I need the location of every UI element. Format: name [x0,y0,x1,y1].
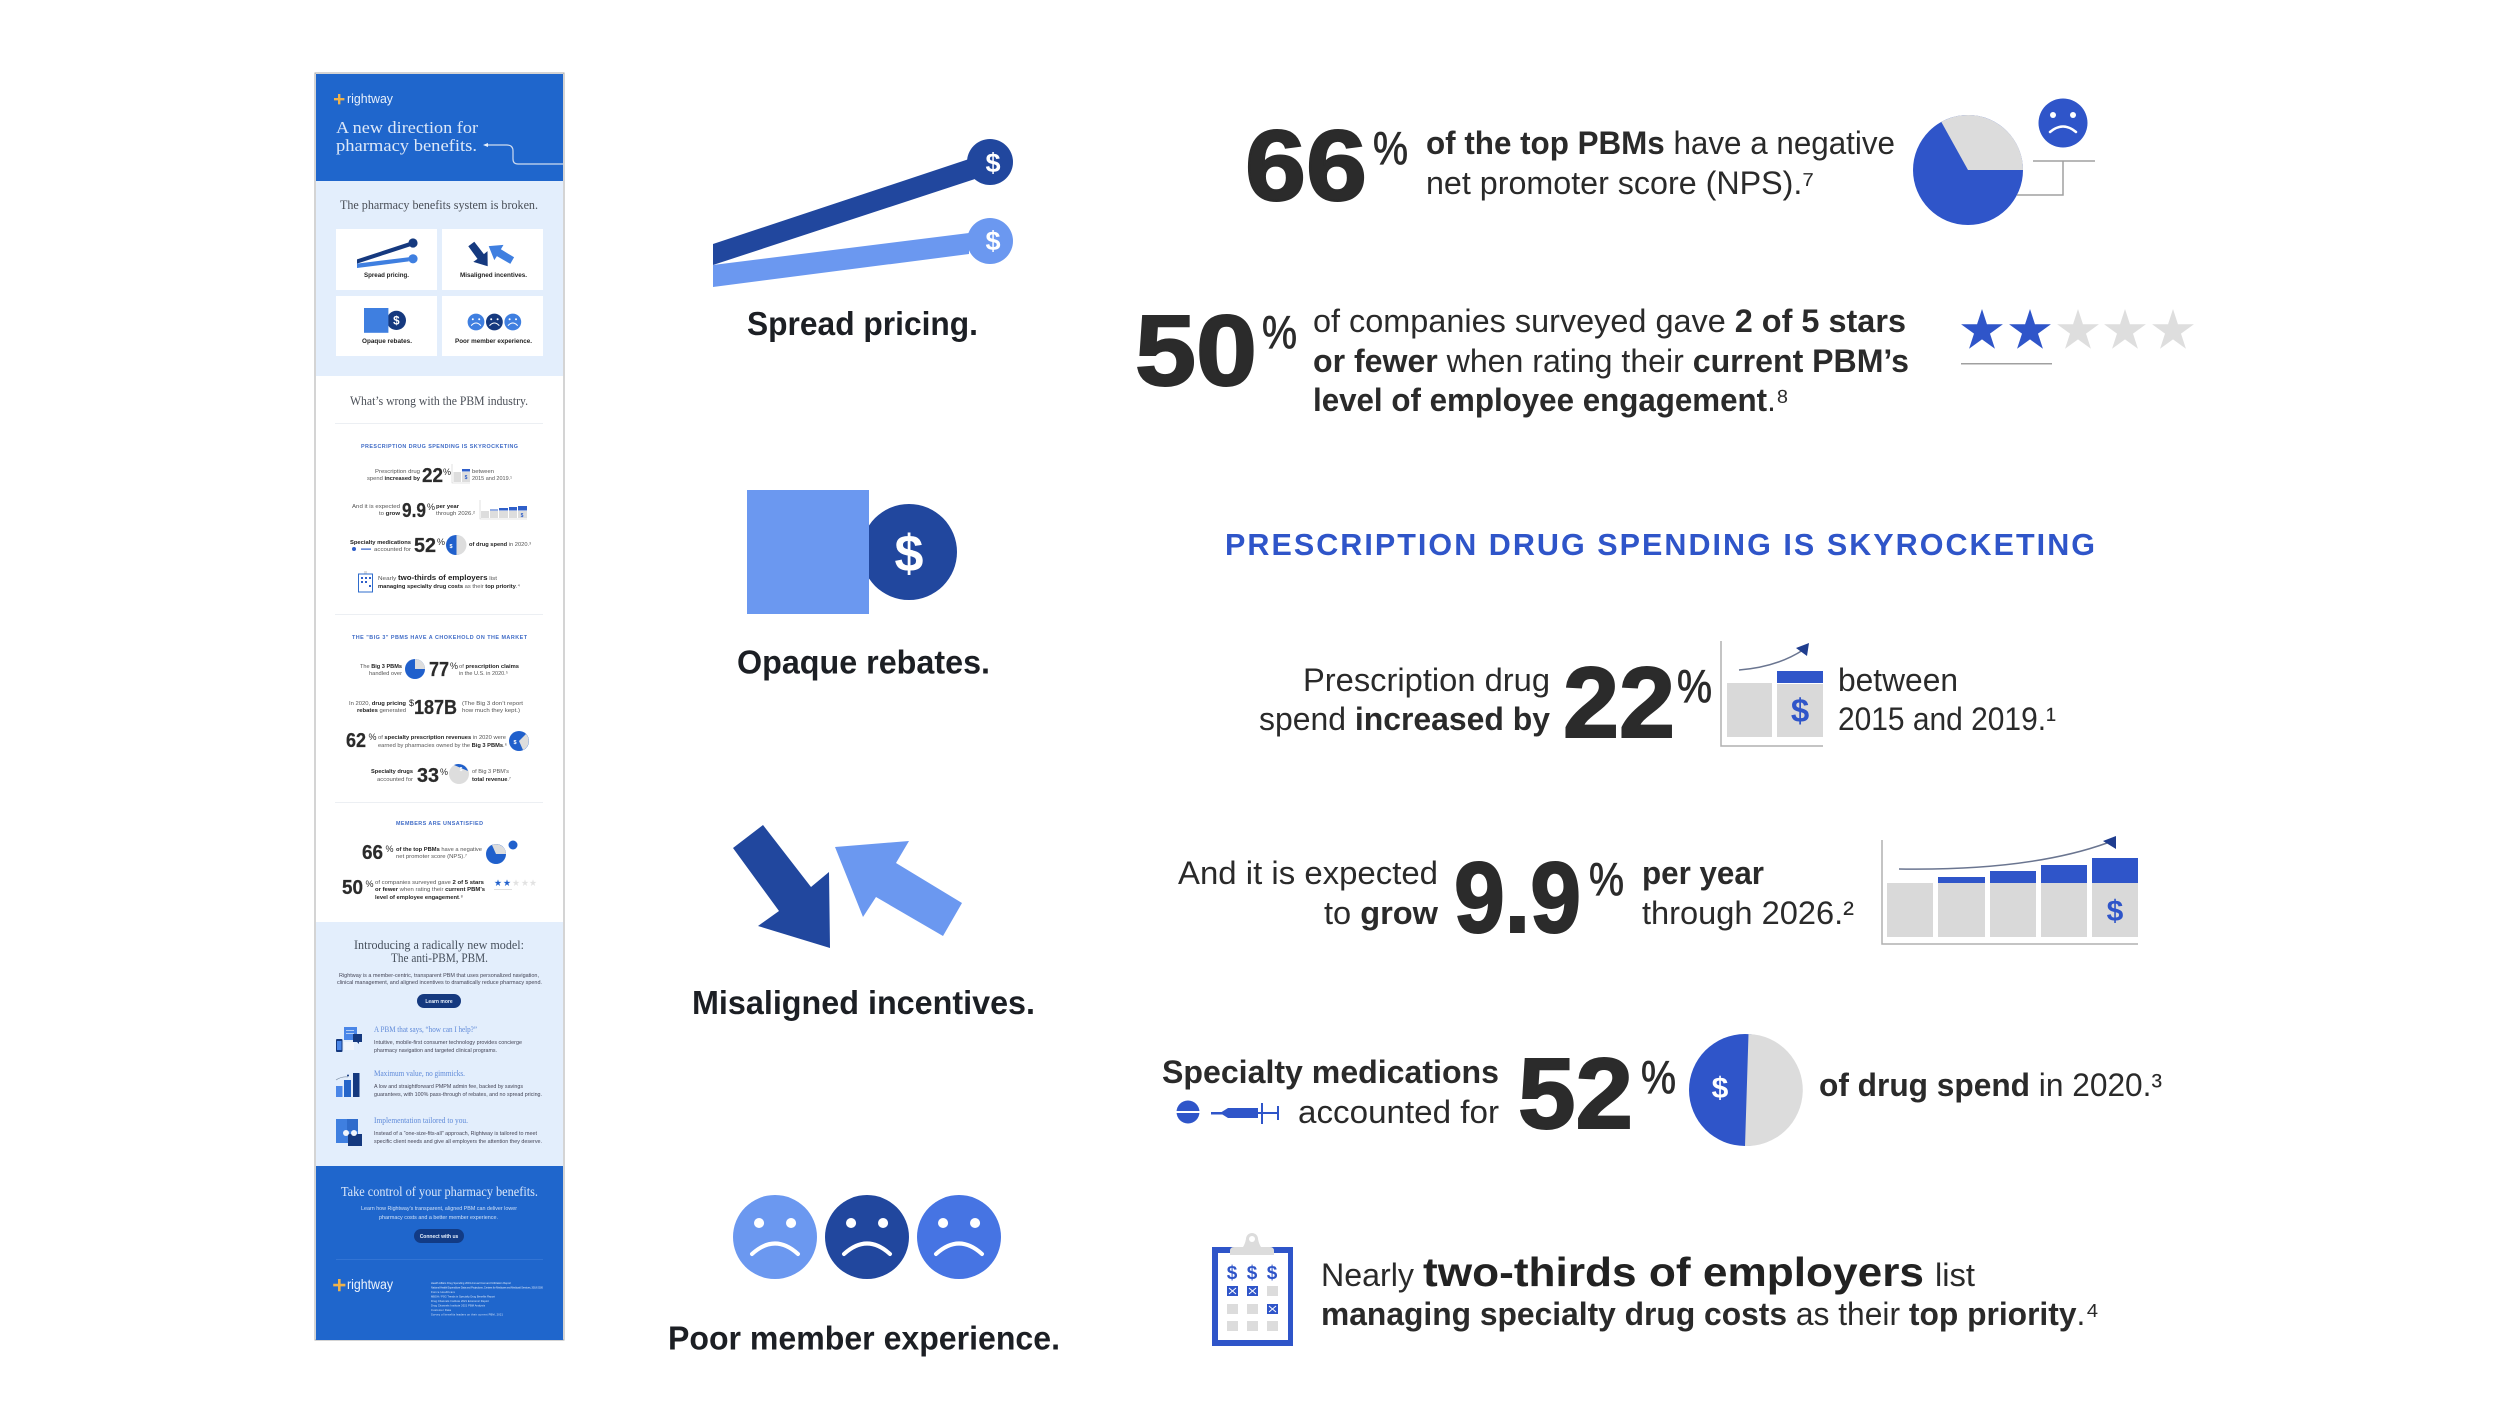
chart: 52 percent pie [1689,1034,1803,1146]
stat mini: 22 percent: $ [465,475,468,481]
text: footnotes: Health Affairs Drug Spending 2019 Annual Cost and Utilization Report [431,1281,511,1285]
stat mini: 22 percent: % [443,467,451,477]
stat: 52 percent: accounted for [1298,1094,1499,1130]
icon: clipboard: $ [1227,1263,1238,1284]
stat mini: 22 percent: 2015 and 2019.¹ [472,476,512,482]
stat: 52 percent: % [1641,1051,1676,1103]
heading mini: unsatisfied: MEMBERS ARE UNSATISFIED [396,821,483,827]
text: footnotes [431,1281,544,1316]
card: opaque rebates mini: $ [393,315,400,328]
stat mini: 50 percent [342,877,536,901]
card: poor member experience mini: Poor member experience. [455,338,532,345]
stat mini: two-thirds of employers [358,571,521,592]
chart: five growing bars [1882,836,2138,944]
stat: 9.9 percent [1178,836,2138,954]
item: maximum value: guarantees, with 100% pass-through of rebates, and no spread pricing. [374,1092,542,1098]
stat mini: 62 percent: 62 [346,730,366,752]
stat: 22 percent: % [1677,660,1712,712]
stat: 66 percent negative NPS [1245,98,2095,225]
stat mini: 52 percent: % [437,537,445,547]
section: members mini [342,821,536,901]
label: opaque rebates: Opaque rebates. [737,644,990,680]
logo: rightway footer: rightway [347,1276,393,1292]
stat mini: 9.9 percent: through 2026.² [436,511,475,517]
stat mini: 66 percent [362,840,518,864]
heading: new model: The anti-PBM, PBM. [391,951,488,965]
sidebar title: A new direction for [336,118,478,137]
text: model description: clinical management, and aligned incentives to dramatically reduce pharmacy spend. [337,980,542,986]
item: maximum value: Maximum value, no gimmicks. [374,1069,465,1078]
text: footnotes: Drug Channels Institute 2021 Economic Report [431,1299,489,1303]
stat: 50 percent two stars: or fewer when rating their current PBM’s [1313,343,1909,379]
stat: 9.9 percent: per year [1642,855,1764,891]
stat mini: 52 percent: 52 [414,535,436,557]
stat mini: 62 percent: earned by pharmacies owned by the Big 3 PBMs.⁶ [378,742,507,749]
stat mini: 62 percent: $ [513,740,517,746]
item: spread pricing [713,139,1013,342]
stat mini: 187B: how much they kept.) [462,708,520,714]
icon: growth bars [336,1073,360,1097]
stat: two-thirds of employers: managing specialty drug costs as their top priority.⁴ [1321,1296,2099,1332]
stat mini: 187B: 187B [414,697,457,719]
icon: spread lines: $ [985,148,1001,178]
stat: 66 percent negative NPS: 66 [1245,110,1367,222]
stat mini: 50 percent: 50 [342,877,363,899]
stat mini: 9.9 percent: 9.9 [402,500,426,522]
text: footer copy: pharmacy costs and a better member experience. [379,1215,498,1221]
label: spread pricing: Spread pricing. [747,305,978,342]
stat: two-thirds of employers: two-thirds of employers [1423,1249,1924,1295]
icon: star rating [1961,309,2194,364]
item: tailored implementation: Instead of a “one-size-fits-all” approach, Rightway is tailored to meet [374,1131,538,1137]
section: prescription spending mini [350,444,531,592]
stat: 22 percent: 22 [1563,647,1675,759]
heading: new model: Introducing a radically new model: [354,938,524,952]
stat mini: 66 percent: % [386,844,394,854]
stat mini: 77 percent [360,659,519,681]
icon: clipboard: $ [1247,1263,1258,1284]
card: misaligned incentives mini [442,229,543,290]
stat: two-thirds of employers: Nearly [1321,1257,1414,1293]
logo: rightway footer [333,1276,393,1292]
text: footer copy [361,1206,517,1221]
text: footnotes: MBGH / PSG Trends in Specialty Drug Benefits Report [431,1294,495,1298]
item: maximum value [336,1069,542,1098]
panel: anti-PBM model [316,922,563,1166]
stat mini: 50 percent: % [366,879,374,889]
stat mini: 187B: $ [409,698,414,708]
stat: 52 percent: of drug spend in 2020.³ [1819,1067,2162,1103]
heading mini: chokehold: THE "BIG 3" PBMS HAVE A CHOKEHOLD ON THE MARKET [352,635,528,641]
stat mini: 52 percent: $ [449,544,453,550]
stat mini: 187B: In 2020, drug pricing [349,701,407,707]
button: learn more [417,994,461,1008]
item: how can I help [336,1025,522,1054]
stat mini: 52 percent: of drug spend in 2020.³ [469,542,531,548]
stat mini: 33 percent: 33 [417,765,439,787]
sidebar title: pharmacy benefits. [336,136,477,155]
button: connect: Connect with us [420,1234,459,1240]
stat mini: two-thirds of employers: Nearly two-thirds of employers list [378,575,498,582]
item: tailored implementation [336,1116,542,1146]
button: connect [414,1229,464,1243]
stat: two-thirds of employers [1212,1233,2099,1346]
heading: system is broken: The pharmacy benefits system is broken. [340,197,538,212]
stat: 9.9 percent: % [1589,853,1624,905]
chart: 66 percent pie [1913,115,2023,225]
card: spread pricing mini [336,229,437,290]
arrow: header direction line [483,143,563,164]
stat: 9.9 percent: to grow [1324,895,1438,931]
stat: 50 percent two stars: of companies surveyed gave 2 of 5 stars [1313,303,1906,339]
section: big 3 mini [346,635,529,787]
chart: two bars [1721,641,1823,746]
stat mini: 77 percent: The Big 3 PBMs [360,664,402,670]
stat mini: 50 percent: of companies surveyed gave 2 of 5 stars [375,880,484,886]
stat mini: 187B: rebates generated [357,708,406,714]
icon: clipboard [1212,1233,1293,1346]
stat mini: 77 percent: in the U.S. in 2020.⁵ [459,670,508,677]
icon: clipboard: $ [1267,1263,1278,1284]
icon: box and coin: $ [895,525,924,583]
stat mini: 22 percent: 22 [422,465,443,487]
stat mini: 9.9 percent: % [427,502,435,512]
stat mini: 66 percent: of the top PBMs have a negative [396,847,482,853]
label: poor member experience: Poor member experience. [668,1320,1060,1356]
stat mini: 22 percent: spend increased by [367,476,421,482]
text: footnotes: National Health Expenditure Data and Projections, Centers for Medicare and Medicaid Services, 2018-2026 [431,1286,544,1290]
card: opaque rebates mini: Opaque rebates. [362,338,412,345]
stat mini: 50 percent: level of employee engagement .⁸ [375,894,464,901]
stat: 9.9 percent: And it is expected [1178,855,1438,891]
stat mini: 22 percent: between [472,469,494,475]
panel: thumbnail infographic sidebar [315,73,564,1340]
stat: 52 percent: 52 [1518,1038,1633,1150]
text: footnotes: Survey of benefits leaders on their current PBM, 2021 [431,1312,504,1316]
heading: prescription drug spending: PRESCRIPTION DRUG SPENDING IS SKYROCKETING [1225,528,2095,562]
card: spread pricing mini: Spread pricing. [364,272,409,279]
item: opaque rebates [737,490,990,680]
panel: call to action footer [316,1166,563,1340]
stat: 22 percent: spend increased by [1259,701,1550,737]
stat: 22 percent: Prescription drug [1303,662,1550,698]
text: model description [337,973,542,986]
stat: 22 percent: between [1838,662,1958,698]
stat: 50 percent two stars: level of employee engagement.⁸ [1313,382,1789,418]
text: model description: Rightway is a member-centric, transparent PBM that uses personalized navigation, [339,973,539,979]
item: poor member experience [668,1195,1060,1356]
stat: 66 percent negative NPS: net promoter score (NPS).⁷ [1426,165,1814,201]
icon: sad face [2038,98,2088,148]
stat mini: 50 percent: or fewer when rating their current PBM’s [375,887,485,893]
stat mini: 77 percent: handled over [369,671,402,677]
logo: rightway header: rightway [347,91,393,106]
card: opaque rebates mini [336,296,437,356]
stat mini: 77 percent: % [450,661,458,671]
item: tailored implementation: Implementation tailored to you. [374,1116,468,1125]
text: footnotes: Customer Data [431,1308,452,1312]
stat: 9.9 percent: 9.9 [1454,842,1581,954]
stat mini: two-thirds of employers: managing specialty drug costs as their top priority.⁴ [378,583,521,590]
stat mini: 52 percent: accounted for [374,547,411,553]
text: footnotes: Fierce Healthcare [431,1290,456,1294]
heading mini: skyrocketing: PRESCRIPTION DRUG SPENDING IS SKYROCKETING [361,444,518,450]
sidebar title [336,118,478,155]
stat mini: 62 percent: of specialty prescription revenues in 2020 were [378,735,506,741]
stat mini: 77 percent: of prescription claims [459,664,519,670]
item: how can I help: pharmacy navigation and targeted clinical programs. [374,1048,497,1054]
stat mini: 22 percent [367,464,512,487]
stat: two-thirds of employers: list [1935,1257,1975,1293]
stat: 50 percent two stars: 50 [1135,295,1257,407]
stat: 9.9 percent: through 2026.² [1642,895,1854,931]
stat: 66 percent negative NPS: of the top PBMs have a negative [1426,125,1895,161]
icon: box and coin [747,490,957,614]
chart: 52 percent pie: $ [1712,1072,1729,1105]
stat mini: 9.9 percent: And it is expected [352,504,400,510]
heading: what's wrong: What’s wrong with the PBM industry. [350,393,528,408]
stat mini: 33 percent: of Big 3 PBM’s [472,769,509,775]
text: footnotes: Drug Channels Institute 2021 PBM Analysis [431,1304,486,1308]
stat mini: 52 percent: Specialty medications [350,540,411,546]
stat mini: 9.9 percent: per year [436,504,460,510]
item: misaligned incentives [692,825,1035,1021]
item: maximum value: A low and straightforward PMPM admin fee, backed by savings [374,1084,524,1090]
stat mini: 187B: (The Big 3 don’t report [462,701,523,707]
stat: 22 percent [1259,641,2056,759]
button: learn more: Learn more [425,999,453,1005]
stat: 50 percent two stars [1135,295,2194,418]
card: misaligned incentives mini: Misaligned incentives. [460,272,527,279]
card: poor member experience mini [442,296,543,356]
stat mini: 9.9 percent [352,500,527,522]
stat: 52 percent [1162,1034,2162,1150]
stat mini: 33 percent: accounted for [377,777,413,783]
stat mini: 9.9 percent: $ [521,513,524,519]
chart: two bars: $ [1791,692,1809,729]
panel: sidebar header [316,74,563,181]
stat mini: 62 percent: % [368,732,377,742]
stat: 66 percent negative NPS: % [1373,122,1408,174]
stat mini: 66 percent: 66 [362,842,383,864]
stat mini: 22 percent: Prescription drug [375,469,420,475]
panel: system is broken [316,181,563,376]
icon: spread lines: $ [985,226,1001,256]
icon: pill and syringe [1176,1100,1279,1124]
label: misaligned incentives: Misaligned incentives. [692,984,1035,1021]
panel: problem icons column [668,139,1060,1356]
stat mini: 33 percent: % [440,767,448,777]
stat mini: 33 percent: total revenue.⁷ [472,776,511,783]
icon: sad faces [733,1195,1001,1279]
stat mini: 33 percent: $ [460,767,463,773]
stat mini: 62 percent [346,730,529,752]
stat mini: 9.9 percent: to grow [379,511,401,517]
item: tailored implementation: specific client needs and give all employers the attention they deserve. [374,1139,542,1145]
item: how can I help: A PBM that says, “how can I help?” [374,1025,477,1034]
icon: opposing arrows [733,825,962,948]
heading: new model [354,938,524,965]
icon: puzzle [336,1119,362,1146]
stat: 52 percent: Specialty medications [1162,1054,1499,1090]
item: how can I help: Intuitive, mobile-first consumer technology provides concierge [374,1040,522,1046]
stat mini: 52 percent [350,535,531,557]
text: footer copy: Learn how Rightway’s transparent, aligned PBM can deliver lower [361,1206,517,1212]
stat mini: 33 percent: Specialty drugs [371,769,413,775]
icon: chat and phone [336,1027,362,1052]
stat mini: 33 percent [371,764,511,787]
stat mini: 77 percent: 77 [429,659,449,681]
chart: five growing bars: $ [2107,895,2124,928]
stat: 50 percent two stars: % [1262,306,1297,358]
stat mini: 66 percent: net promoter score (NPS).⁷ [396,853,467,860]
stat mini: 187B [349,697,523,719]
icon: spread lines [713,139,1013,287]
stat: 22 percent: 2015 and 2019.¹ [1838,701,2056,737]
heading: take control: Take control of your pharmacy benefits. [341,1184,538,1199]
